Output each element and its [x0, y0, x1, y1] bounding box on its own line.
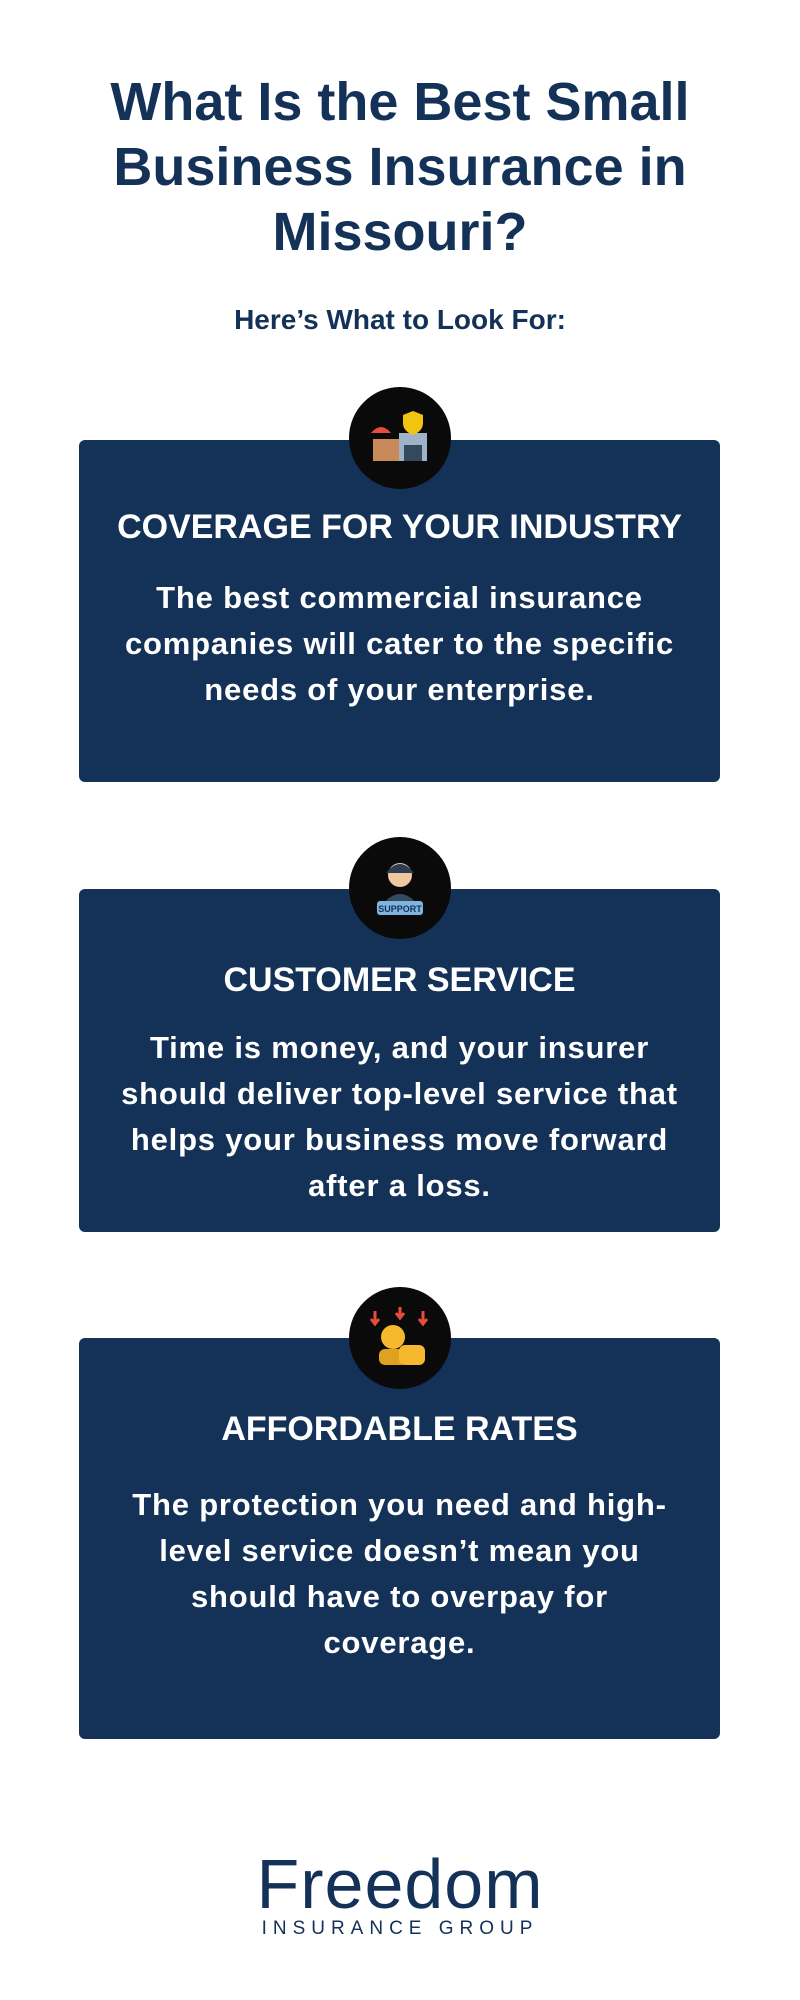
title: What Is the Best Small [110, 72, 690, 132]
text: coverage: needs of your enterprise. [204, 672, 595, 707]
logo: INSURANCE GROUP [262, 1918, 538, 1939]
text: coverage: The best commercial insurance [156, 580, 643, 615]
text: customer service: Time is money, and your insurer [150, 1030, 649, 1065]
heading: customer service: CUSTOMER SERVICE [223, 961, 576, 999]
text: customer service [121, 1030, 678, 1203]
text: coverage [125, 580, 674, 707]
text: affordable rates: should have to overpay for [191, 1579, 608, 1614]
panel: customer service [79, 889, 720, 1232]
heading: coverage: COVERAGE FOR YOUR INDUSTRY [117, 508, 682, 546]
text: customer service: helps your business move forward [131, 1122, 668, 1157]
logo: Freedom [256, 1845, 544, 1923]
panel: coverage [79, 440, 720, 782]
text: affordable rates [132, 1487, 667, 1660]
icon: coins [349, 1287, 451, 1389]
title: Business Insurance in [113, 137, 687, 197]
text: coverage: companies will cater to the specific [125, 626, 674, 661]
panel: affordable rates [79, 1338, 720, 1739]
title [110, 72, 690, 262]
text: affordable rates: The protection you need and high- [132, 1487, 667, 1522]
subtitle: Here’s What to Look For: [234, 304, 566, 335]
heading: affordable rates: AFFORDABLE RATES [221, 1410, 578, 1448]
icon: support agent: SUPPORT [378, 904, 422, 914]
text: customer service: should deliver top-level service that [121, 1076, 678, 1111]
text: affordable rates: level service doesn’t mean you [159, 1533, 640, 1568]
icon: support agent [349, 837, 451, 939]
title: Missouri? [272, 202, 528, 262]
icon: store with shield [349, 387, 451, 489]
text: customer service: after a loss. [308, 1168, 491, 1203]
text: affordable rates: coverage. [324, 1625, 475, 1660]
